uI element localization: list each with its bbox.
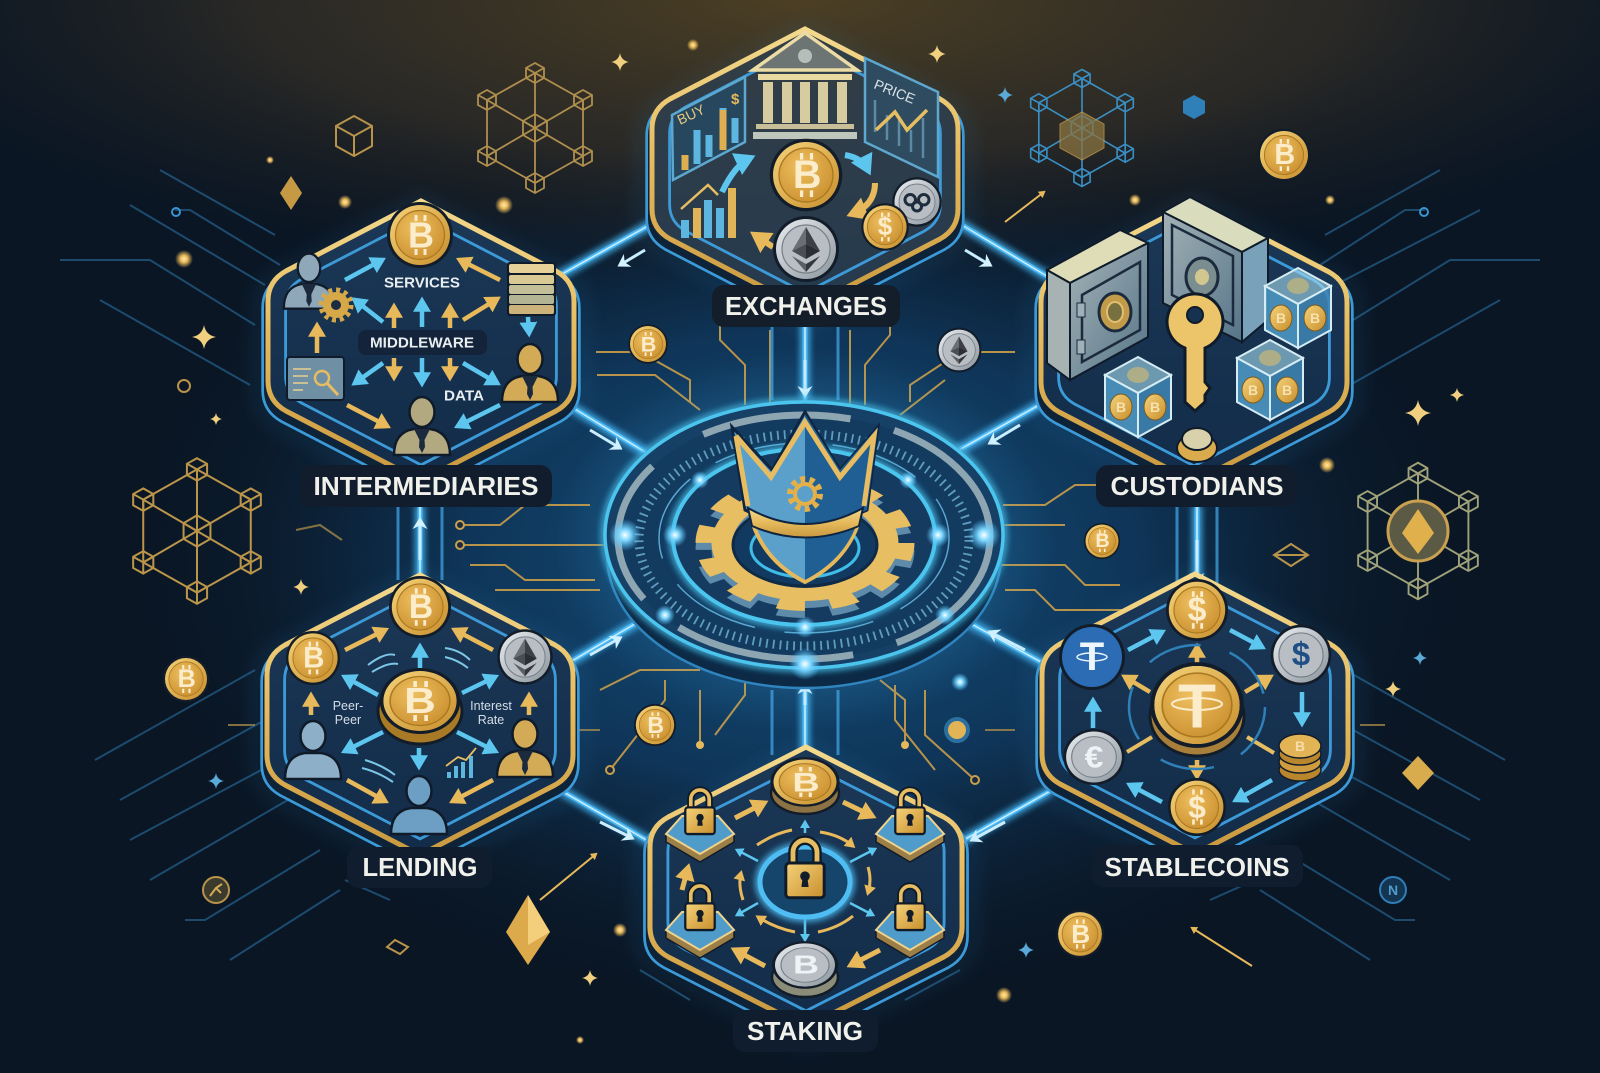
gold arrows in background <box>540 192 1252 966</box>
icon: ripple coin <box>892 177 942 227</box>
text: peer-peer: Peer- <box>333 699 363 713</box>
icon: bottom dollar coin <box>1168 778 1226 836</box>
decorative network with ethereum coin: right <box>1358 463 1478 599</box>
icon: crypto cube top right: B <box>1276 310 1286 326</box>
decorative network: top left <box>478 63 592 193</box>
icon: euro coin <box>1063 729 1125 785</box>
icon: person bottom <box>391 776 447 834</box>
icon: ethereum coin <box>497 629 553 685</box>
icon: N token: N <box>1388 882 1398 898</box>
decorative coins: B <box>1274 139 1295 171</box>
label: Lending <box>347 847 492 888</box>
text: data: DATA <box>444 388 484 404</box>
icon: person right <box>497 719 553 777</box>
label: Stablecoins: STABLECOINS <box>1104 852 1290 882</box>
icon: dollar coin: $ <box>878 213 893 241</box>
icon: shield <box>748 508 863 582</box>
decorative ethereum diamonds and cubes <box>280 95 1434 965</box>
icon: bottom silver coin <box>772 941 838 997</box>
icon: crypto cube left <box>1105 357 1171 437</box>
icon: person bottom <box>394 397 450 455</box>
icon: blue tether coin: T <box>1080 635 1104 679</box>
flow arrows <box>1093 630 1302 802</box>
gold circuit traces around the centre <box>228 298 1385 784</box>
label: Lending: LENDING <box>362 852 478 882</box>
icon: crypto cube right <box>1237 340 1303 420</box>
icon: crypto cube left: B <box>1150 399 1160 415</box>
icon: rising bars <box>681 185 732 238</box>
circuit traces: left and right side <box>60 170 1540 1000</box>
icon: crypto cube right: B <box>1282 382 1292 398</box>
icon: top bitcoin coin: B <box>792 767 820 797</box>
icon: ethereum coin <box>773 216 839 282</box>
sparkles and glowing dots <box>175 39 1464 1044</box>
icon: gold key <box>1167 294 1223 411</box>
platform: Staking <box>641 747 971 1043</box>
icon: crypto cube top right <box>1265 268 1331 348</box>
panel: price chart: PRICE <box>872 76 918 107</box>
decorative network: top right <box>1031 70 1133 186</box>
icon: coin stack: B <box>1295 738 1305 754</box>
label: Exchanges <box>712 285 900 327</box>
exchange arrows <box>722 155 875 247</box>
glowing connectors between platforms and centre <box>398 222 1217 845</box>
label: Intermediaries <box>300 465 552 507</box>
icon: person with gear <box>284 254 351 320</box>
central emblem: crown, shield and gear <box>555 350 1055 730</box>
icon: crypto cube right: B <box>1248 382 1258 398</box>
label: Staking <box>733 1010 878 1052</box>
decorative coins: B <box>1071 919 1090 949</box>
icon: crypto cube left: B <box>1116 399 1126 415</box>
icon: blue tether coin <box>1059 624 1125 690</box>
icon: central tether coin: T <box>1178 672 1216 742</box>
panel: price chart <box>865 58 938 177</box>
label: middleware <box>358 330 487 355</box>
label: Intermediaries: INTERMEDIARIES <box>314 471 538 501</box>
icon: lock top left <box>666 790 734 862</box>
icon: top bitcoin coin <box>770 757 840 814</box>
icon: bottom dollar coin: $ <box>1188 789 1206 825</box>
icon: lock top right <box>876 790 944 862</box>
icon: N token <box>1380 877 1406 903</box>
panel: buy chart <box>672 77 745 180</box>
label: Stablecoins <box>1092 845 1303 887</box>
icon: dollar coin <box>861 203 909 251</box>
icon: large centre coin: B <box>404 681 436 721</box>
decorative coins: B <box>178 665 196 693</box>
icon: gold token <box>203 877 229 903</box>
icon: left safe <box>1047 230 1148 380</box>
text: interest rate: Rate <box>478 713 504 727</box>
label: Exchanges: EXCHANGES <box>725 291 887 321</box>
text: peer-peer: Peer <box>335 713 361 727</box>
icon: key pedestal <box>1177 428 1217 462</box>
icon: bitcoin coin top: B <box>409 588 433 626</box>
icon: top dollar coin <box>1166 579 1228 641</box>
platform: Exchanges <box>643 29 967 325</box>
icon: bitcoin coin left: B <box>303 641 324 675</box>
icon: coin stack <box>1279 734 1321 781</box>
icon: document with magnifier <box>287 357 344 400</box>
icon: crown <box>732 412 878 527</box>
label: Custodians: CUSTODIANS <box>1110 471 1284 501</box>
icon: gear <box>705 481 905 612</box>
decorative network: left <box>133 458 261 604</box>
icon: bitcoin coin: B <box>408 214 434 256</box>
label: Staking: STAKING <box>747 1016 863 1046</box>
icon: bitcoin coin left <box>286 631 340 685</box>
icon: server stack <box>507 262 556 316</box>
platform: Lending <box>258 575 582 871</box>
flow arrows <box>317 260 529 426</box>
icon: person left <box>285 721 341 779</box>
platform: Stablecoins <box>1033 574 1357 870</box>
decorative coins: B <box>1095 530 1110 552</box>
icon: rear safe <box>1163 197 1268 342</box>
label: Custodians <box>1096 465 1297 507</box>
icon: bitcoin coin: B <box>793 153 821 197</box>
icon: euro coin: € <box>1085 740 1103 774</box>
decorative coins: B <box>647 712 664 738</box>
icon: top dollar coin: $ <box>1188 591 1207 629</box>
icon: bank building <box>753 33 857 139</box>
icon: silver dollar coin: $ <box>1292 636 1310 674</box>
icon: bitcoin coin top <box>389 576 451 638</box>
platform: Custodians <box>1032 197 1356 498</box>
text: services: SERVICES <box>384 274 460 292</box>
panel: buy chart: $ <box>731 91 740 108</box>
icon: central lock with ring <box>760 840 850 917</box>
icon: crypto cube top right: B <box>1310 310 1320 326</box>
icon: person right <box>502 344 558 402</box>
icon: large centre coin <box>378 668 462 744</box>
icon: bitcoin coin <box>387 202 453 268</box>
icon: mini bar chart <box>446 748 476 778</box>
flow arrows <box>682 802 880 966</box>
icon: bottom silver coin: B <box>793 951 819 979</box>
label: middleware: MIDDLEWARE <box>370 334 474 352</box>
decorative coins <box>163 129 1310 958</box>
decorative coins: B <box>641 332 656 356</box>
icon: lock bottom left <box>666 886 734 958</box>
flow arrows <box>311 630 529 801</box>
icon: silver dollar coin <box>1271 625 1331 685</box>
platform: Intermediaries <box>259 201 583 497</box>
panel: buy chart: BUY <box>675 101 708 128</box>
text: interest rate: Interest <box>470 699 512 713</box>
icon: lock bottom right <box>876 886 944 958</box>
icon: central tether coin <box>1150 662 1244 756</box>
ring light points <box>609 471 1000 691</box>
icon: bitcoin coin <box>770 139 842 211</box>
